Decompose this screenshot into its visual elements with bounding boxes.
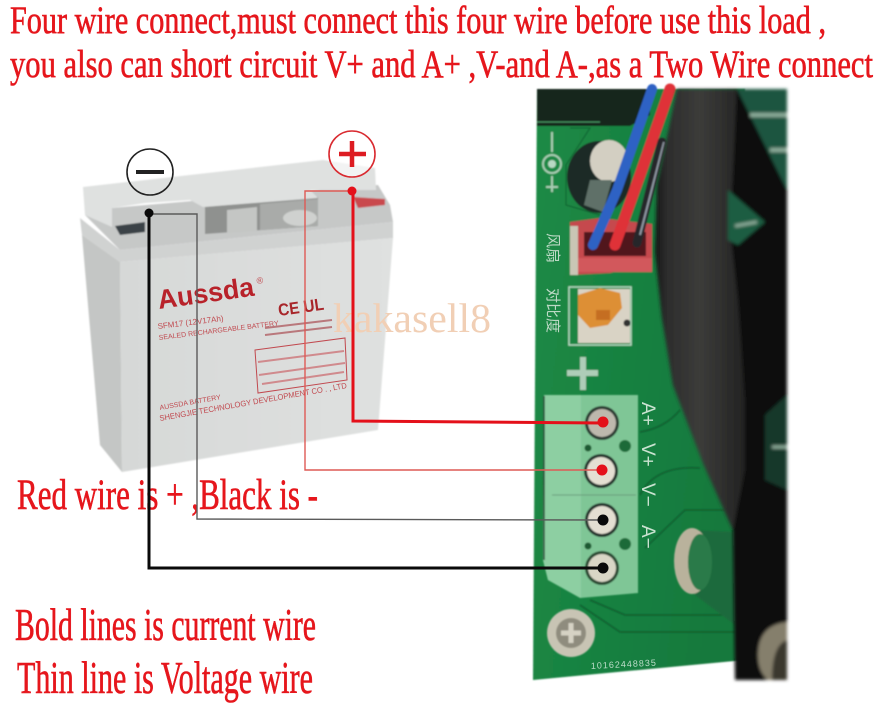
battery label text xyxy=(156,272,348,423)
terminal labels: V+ xyxy=(637,443,658,467)
photo: load board xyxy=(533,89,787,680)
bold black current wire xyxy=(149,213,602,568)
plus mark xyxy=(567,357,598,390)
bold red current wire xyxy=(353,191,602,423)
battery label text: SHENGJIE TECHNOLOGY DEVELOPMENT CO . , LTD xyxy=(159,381,348,423)
battery label text: Aussda xyxy=(156,272,257,315)
marks xyxy=(543,155,561,173)
wires xyxy=(637,142,662,243)
battery body behind lid xyxy=(85,185,393,250)
note: wire polarity: Red wire is + ,Black is - xyxy=(17,472,318,519)
icon: negative terminal xyxy=(127,149,173,195)
capacitor xyxy=(567,141,631,213)
contrast trimmer xyxy=(569,287,631,345)
battery xyxy=(80,160,393,472)
battery lip xyxy=(80,218,393,262)
terminals xyxy=(115,222,145,235)
silkscreen labels xyxy=(544,233,561,333)
terminal labels: V− xyxy=(637,483,658,507)
fan connector xyxy=(570,218,652,275)
pcb xyxy=(533,89,745,680)
note: bold lines: Bold lines is current wire xyxy=(15,600,316,650)
thin red voltage wire xyxy=(305,191,602,470)
terminal labels: A− xyxy=(637,525,658,549)
battery label text: SEALED RECHARGEABLE BATTERY xyxy=(158,320,279,342)
watermark: kakasell8 xyxy=(333,295,491,341)
battery top xyxy=(83,160,376,227)
battery label text: AUSSDA BATTERY xyxy=(159,394,222,412)
standoff xyxy=(690,530,735,625)
note: thin line: Thin line is Voltage wire xyxy=(17,653,313,703)
icon: positive terminal xyxy=(329,131,375,177)
mounting screw xyxy=(547,609,595,657)
terminal labels: A+ xyxy=(637,402,658,426)
recess windows xyxy=(205,197,318,234)
traces xyxy=(580,410,735,632)
terminal labels xyxy=(637,402,658,549)
silkscreen labels: 对比度 xyxy=(544,288,561,333)
title xyxy=(10,0,873,86)
battery side xyxy=(82,235,122,472)
black cable xyxy=(655,89,787,680)
terminal block xyxy=(543,395,735,657)
battery front xyxy=(120,238,393,472)
battery label text: CE UL xyxy=(277,295,325,320)
serial number: 10162448835 xyxy=(591,658,657,671)
battery label text: SFM17 (12V17Ah) xyxy=(157,314,224,331)
silkscreen labels: 风扇 xyxy=(544,233,561,263)
wire end dots xyxy=(144,186,608,574)
thin black voltage wire xyxy=(149,214,602,520)
battery label text: ® xyxy=(256,275,264,286)
